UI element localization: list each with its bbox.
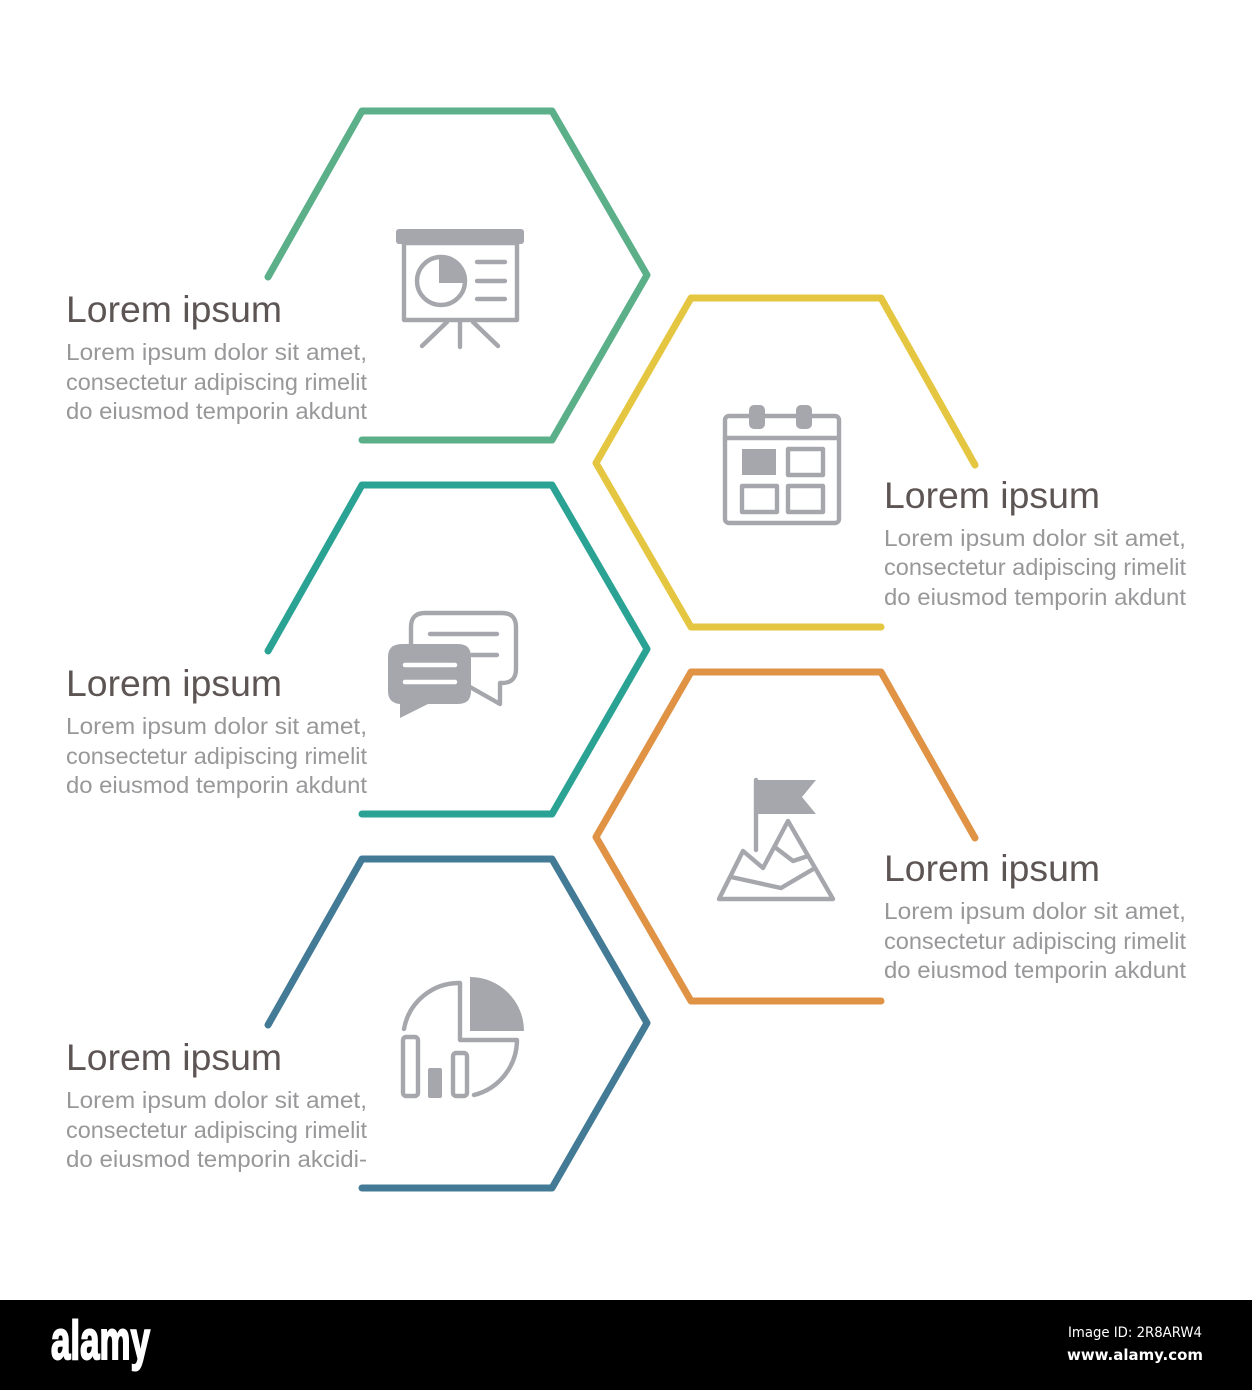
heading: Lorem ipsum — [884, 848, 1100, 889]
body text — [66, 339, 367, 424]
icon: speech bubbles — [388, 613, 516, 718]
body text: consectetur adipiscing rimelit — [66, 369, 367, 395]
body text: Lorem ipsum dolor sit amet, — [66, 1087, 367, 1113]
panel: teal hexagon step — [66, 485, 647, 814]
body text: do eiusmod temporin akcidi- — [66, 1146, 367, 1172]
panel: blue hexagon step — [66, 859, 647, 1188]
body text: Lorem ipsum dolor sit amet, — [66, 339, 367, 365]
green hexagon outline — [268, 111, 647, 440]
body text: do eiusmod temporin akdunt — [66, 398, 367, 424]
footer: stock photo bar — [0, 1300, 1252, 1390]
body text: do eiusmod temporin akdunt — [884, 584, 1186, 610]
body text: Lorem ipsum dolor sit amet, — [884, 898, 1186, 924]
heading: Lorem ipsum — [66, 289, 282, 330]
body text: consectetur adipiscing rimelit — [884, 928, 1186, 954]
body text — [66, 713, 367, 798]
website: www.alamy.com — [1067, 1346, 1203, 1364]
heading: Lorem ipsum — [884, 475, 1100, 516]
heading: Lorem ipsum — [66, 1037, 282, 1078]
icon: pie and bar chart — [403, 977, 524, 1098]
icon: flag on mountain — [719, 780, 833, 899]
body text: consectetur adipiscing rimelit — [884, 554, 1186, 580]
body text — [66, 1087, 367, 1172]
panel: orange hexagon step — [596, 672, 1186, 1001]
panel: green hexagon step — [66, 111, 647, 440]
yellow hexagon outline — [596, 298, 975, 627]
body text — [884, 525, 1186, 610]
body text: do eiusmod temporin akdunt — [66, 772, 367, 798]
body text: do eiusmod temporin akdunt — [884, 957, 1186, 983]
heading: Lorem ipsum — [66, 663, 282, 704]
blue hexagon outline — [268, 859, 647, 1188]
orange hexagon outline — [596, 672, 975, 1001]
body text — [884, 898, 1186, 983]
teal hexagon outline — [268, 485, 647, 814]
body text: consectetur adipiscing rimelit — [66, 743, 367, 769]
body text: consectetur adipiscing rimelit — [66, 1117, 367, 1143]
image id: Image ID: 2R8ARW4 — [1068, 1325, 1202, 1341]
panel: yellow hexagon step — [596, 298, 1186, 627]
icon: presentation board — [396, 229, 524, 347]
logo wordmark: alamy — [51, 1309, 150, 1371]
body text: Lorem ipsum dolor sit amet, — [884, 525, 1186, 551]
icon: calendar — [725, 405, 839, 523]
body text: Lorem ipsum dolor sit amet, — [66, 713, 367, 739]
